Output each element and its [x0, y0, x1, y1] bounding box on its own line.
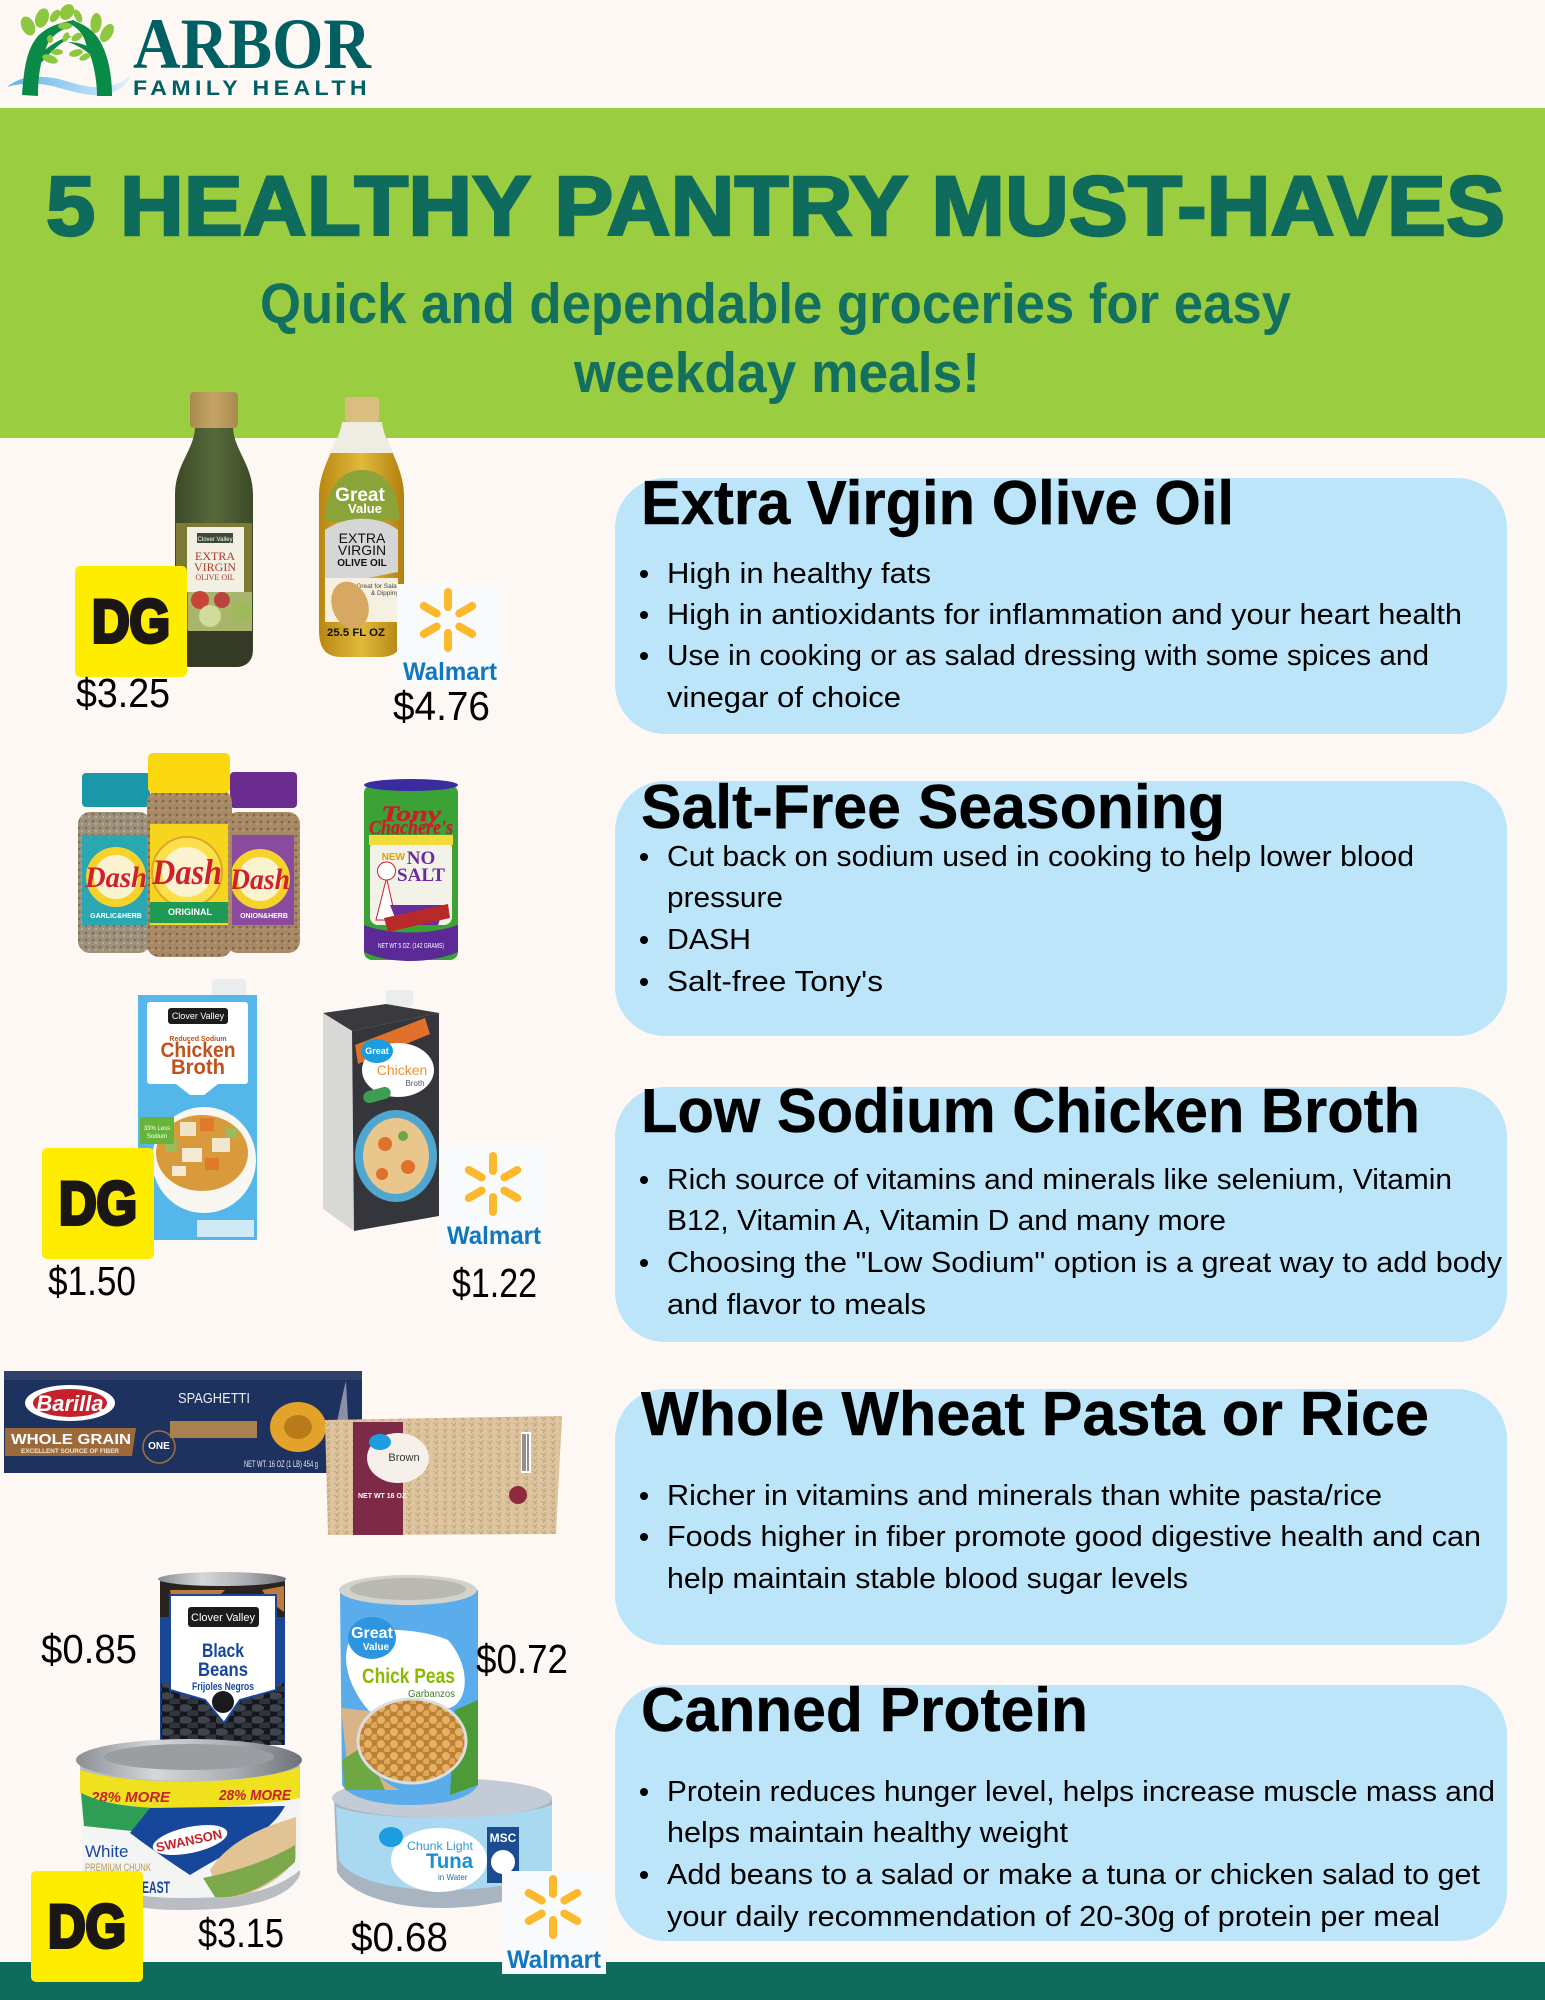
product: Great Value brown rice bag: NET WT 16 OZ	[358, 1493, 407, 1500]
bullet list	[640, 841, 1414, 998]
product: Clover Valley black beans can: Clover Valley	[191, 1612, 255, 1624]
subtitle: Quick and dependable groceries for easy	[260, 272, 1291, 336]
yellow jar	[147, 753, 232, 957]
product: Swanson canned chicken	[76, 1739, 302, 1910]
badge: Dollar General: DG	[59, 1170, 137, 1237]
product: Clover Valley chicken broth carton: Chicken	[160, 1039, 236, 1062]
product: Tony Chachere's no salt seasoning: NO	[407, 848, 435, 869]
product: Clover Valley chicken broth carton: Clover Valley	[172, 1011, 225, 1021]
product: Clover Valley chicken broth carton: Sodium	[147, 1134, 167, 1140]
teal jar: GARLIC&HERB	[90, 913, 142, 920]
product: Clover Valley chicken broth carton: Reduced Sodium	[169, 1036, 227, 1043]
product: Swanson canned chicken: SWANSON	[155, 1826, 223, 1855]
card background	[615, 1685, 1507, 1941]
panel: low sodium chicken broth	[615, 1077, 1507, 1342]
badge: Dollar General	[42, 1148, 154, 1259]
badge: Walmart: Walmart	[507, 1946, 602, 1974]
product: Great Value olive oil bottle: EXTRA	[339, 530, 386, 546]
product: Clover Valley black beans can	[158, 1572, 286, 1745]
product: Great Value brown rice bag: Brown	[388, 1452, 420, 1464]
bullet list: B12, Vitamin A, Vitamin D and many more	[667, 1205, 1226, 1237]
product: Great Value olive oil bottle: Great	[335, 485, 385, 506]
heading: Whole Wheat Pasta or Rice	[641, 1380, 1429, 1449]
teal jar: Dash	[84, 861, 147, 894]
badge: Dollar General	[31, 1871, 143, 1982]
bullet list: High in antioxidants for inflammation and your heart health	[667, 599, 1462, 631]
product: Great Value chunk light tuna can: MSC	[490, 1831, 517, 1845]
product: Great Value chicken broth carton: Great	[365, 1046, 389, 1056]
bullet list: Use in cooking or as salad dressing with some spices and	[667, 640, 1429, 672]
product: Barilla whole grain spaghetti box: WHOLE GRAIN	[11, 1431, 131, 1448]
product: Tony Chachere's no salt seasoning	[364, 779, 458, 961]
price: $4.76: $4.76	[393, 683, 490, 729]
heading: Low Sodium Chicken Broth	[641, 1077, 1420, 1146]
product: Clover Valley olive oil bottle	[175, 392, 253, 667]
product: Great Value olive oil bottle: Great for Salads	[356, 583, 404, 590]
yellow jar: Dash	[151, 852, 222, 892]
badge: Dollar General: DG	[48, 1893, 126, 1960]
panel: canned protein	[615, 1676, 1507, 1941]
product: Barilla whole grain spaghetti box	[4, 1371, 362, 1473]
price: $0.85: $0.85	[41, 1626, 137, 1672]
card background	[615, 1087, 1507, 1342]
bullet list: Rich source of vitamins and minerals like selenium, Vitamin	[667, 1164, 1452, 1196]
badge: Walmart	[502, 1871, 606, 1974]
yellow jar: ORIGINAL	[168, 907, 213, 917]
product: Barilla whole grain spaghetti box: NET WT. 16 OZ (1 LB) 454 g	[244, 1459, 318, 1469]
price: $3.15: $3.15	[198, 1910, 284, 1956]
bullet list: helps maintain healthy weight	[667, 1817, 1068, 1849]
product: Swanson canned chicken: PREMIUM CHUNK	[85, 1862, 151, 1874]
product: Swanson canned chicken: 28% MORE	[218, 1787, 292, 1804]
heading: Canned Protein	[641, 1676, 1088, 1745]
product: Clover Valley olive oil bottle: Clover Valley	[198, 537, 232, 543]
product: Barilla whole grain spaghetti box: EXCELLENT SOURCE OF FIBER	[21, 1448, 119, 1455]
product: Clover Valley olive oil bottle: VIRGIN	[194, 560, 236, 574]
bullet list: and flavor to meals	[667, 1289, 926, 1321]
card background	[615, 478, 1507, 734]
product: Great Value chick peas can: Garbanzos	[408, 1689, 455, 1700]
card background	[615, 781, 1507, 1036]
bullet list: Cut back on sodium used in cooking to help lower blood	[667, 841, 1414, 873]
product: Tony Chachere's no salt seasoning: NET WT 5 OZ. (142 GRAMS)	[378, 943, 444, 950]
product: Great Value chicken broth carton: Broth	[405, 1079, 425, 1088]
product: Great Value olive oil bottle: Value	[348, 501, 382, 516]
panel: whole wheat pasta or rice	[615, 1380, 1507, 1645]
price: $0.68: $0.68	[351, 1914, 448, 1960]
product: Swanson canned chicken: White	[85, 1842, 128, 1861]
purple jar	[226, 772, 300, 953]
price: $0.72: $0.72	[476, 1636, 568, 1682]
product: Clover Valley chicken broth carton	[138, 979, 257, 1240]
product: Great Value olive oil bottle	[319, 397, 404, 657]
product: Barilla whole grain spaghetti box: ONE	[148, 1441, 170, 1452]
badge: Walmart	[397, 584, 501, 686]
footer bar	[0, 1962, 1545, 2000]
title: 5 HEALTHY PANTRY MUST-HAVES	[46, 159, 1505, 253]
card background	[615, 1389, 1507, 1645]
panel: extra virgin olive oil	[615, 469, 1507, 734]
price: $1.50: $1.50	[48, 1258, 136, 1304]
panel: salt-free seasoning	[615, 773, 1507, 1036]
teal jar	[78, 773, 151, 953]
product: Dash seasoning jars	[78, 753, 300, 957]
banner background	[0, 108, 1545, 438]
bullet list	[640, 1776, 1495, 1933]
product: Tony Chachere's no salt seasoning: SALT	[397, 865, 445, 886]
bullet list: your daily recommendation of 20-30g of protein per meal	[667, 1901, 1440, 1933]
product: Clover Valley olive oil bottle: OLIVE OIL	[195, 573, 235, 582]
product: Great Value chunk light tuna can	[332, 1778, 552, 1908]
bullet list	[640, 1164, 1503, 1321]
bullet list: Protein reduces hunger level, helps increase muscle mass and	[667, 1776, 1495, 1808]
bullet list	[640, 558, 1462, 714]
bullet list: Richer in vitamins and minerals than white pasta/rice	[667, 1480, 1382, 1512]
logo wordmark: ARBOR: ARBOR	[133, 4, 372, 84]
bullet list: pressure	[667, 882, 783, 914]
product: Great Value olive oil bottle: 25.5 FL OZ	[327, 627, 385, 639]
bullet list: Foods higher in fiber promote good digestive health and can	[667, 1521, 1481, 1553]
product: Great Value chick peas can	[339, 1575, 478, 1805]
heading: Salt-Free Seasoning	[641, 773, 1225, 842]
badge: Dollar General	[75, 566, 187, 677]
bullet list: Salt-free Tony's	[667, 966, 883, 998]
product: Barilla whole grain spaghetti box: SPAGHETTI	[178, 1390, 250, 1407]
product: Great Value chick peas can: Great	[351, 1625, 394, 1642]
bullet list: High in healthy fats	[667, 558, 931, 590]
icon: arbor tree	[7, 1, 132, 96]
product: Clover Valley black beans can: Black	[202, 1641, 244, 1662]
bullet list: Choosing the "Low Sodium" option is a great way to add body	[667, 1247, 1503, 1279]
product: Great Value chicken broth carton	[323, 990, 439, 1231]
logo: Arbor Family Health	[7, 1, 372, 100]
logo wordmark: Family Health: FAMILY HEALTH	[133, 77, 371, 100]
badge: Walmart: Walmart	[403, 658, 498, 686]
product: Barilla whole grain spaghetti box: Barilla	[36, 1391, 104, 1416]
badge: Walmart	[442, 1148, 546, 1252]
product: Clover Valley black beans can: Frijoles Negros	[192, 1681, 254, 1693]
product: Great Value olive oil bottle: OLIVE OIL	[337, 558, 387, 569]
price: $1.22: $1.22	[452, 1260, 537, 1306]
product: Great Value chicken broth carton: Chicken	[377, 1062, 427, 1078]
bullet list	[640, 1480, 1481, 1595]
product: Great Value olive oil bottle: VIRGIN	[338, 542, 386, 558]
product: Clover Valley chicken broth carton: Broth	[171, 1056, 225, 1079]
product: Swanson canned chicken: EAST	[142, 1878, 170, 1897]
product: Clover Valley black beans can: Beans	[198, 1660, 248, 1681]
product: Great Value chunk light tuna can: in Water	[438, 1873, 468, 1882]
purple jar: Dash	[229, 863, 290, 896]
product: Tony Chachere's no salt seasoning: NEW	[382, 852, 406, 863]
product: Great Value chunk light tuna can: Chunk Light	[407, 1839, 474, 1853]
badge: Dollar General: DG	[92, 588, 170, 655]
bullet list: help maintain stable blood sugar levels	[667, 1563, 1188, 1595]
bullet list: vinegar of choice	[667, 682, 901, 714]
heading: Extra Virgin Olive Oil	[641, 469, 1234, 538]
price: $3.25: $3.25	[76, 670, 170, 716]
product: Clover Valley chicken broth carton: 33% Less	[144, 1126, 170, 1132]
bullet list: Add beans to a salad or make a tuna or chicken salad to get	[667, 1859, 1480, 1891]
product: Great Value brown rice bag	[325, 1416, 562, 1535]
product: Great Value olive oil bottle: & Dipping	[371, 590, 399, 597]
header banner	[0, 108, 1545, 438]
product: Great Value chick peas can: Chick Peas	[362, 1665, 455, 1688]
subtitle	[260, 272, 1291, 405]
subtitle: weekday meals!	[573, 341, 980, 405]
badge: Walmart: Walmart	[447, 1222, 542, 1250]
product: Tony Chachere's no salt seasoning: Chachere's	[369, 817, 453, 839]
product: Great Value chick peas can: Value	[363, 1642, 389, 1653]
bullet list: DASH	[667, 924, 751, 956]
product: Tony Chachere's no salt seasoning: Tony	[381, 801, 441, 826]
purple jar: ONION&HERB	[240, 913, 288, 920]
product: Swanson canned chicken: 28% MORE	[90, 1789, 171, 1806]
product: Great Value chunk light tuna can: Tuna	[426, 1850, 473, 1873]
product: Clover Valley olive oil bottle: EXTRA	[195, 549, 235, 563]
